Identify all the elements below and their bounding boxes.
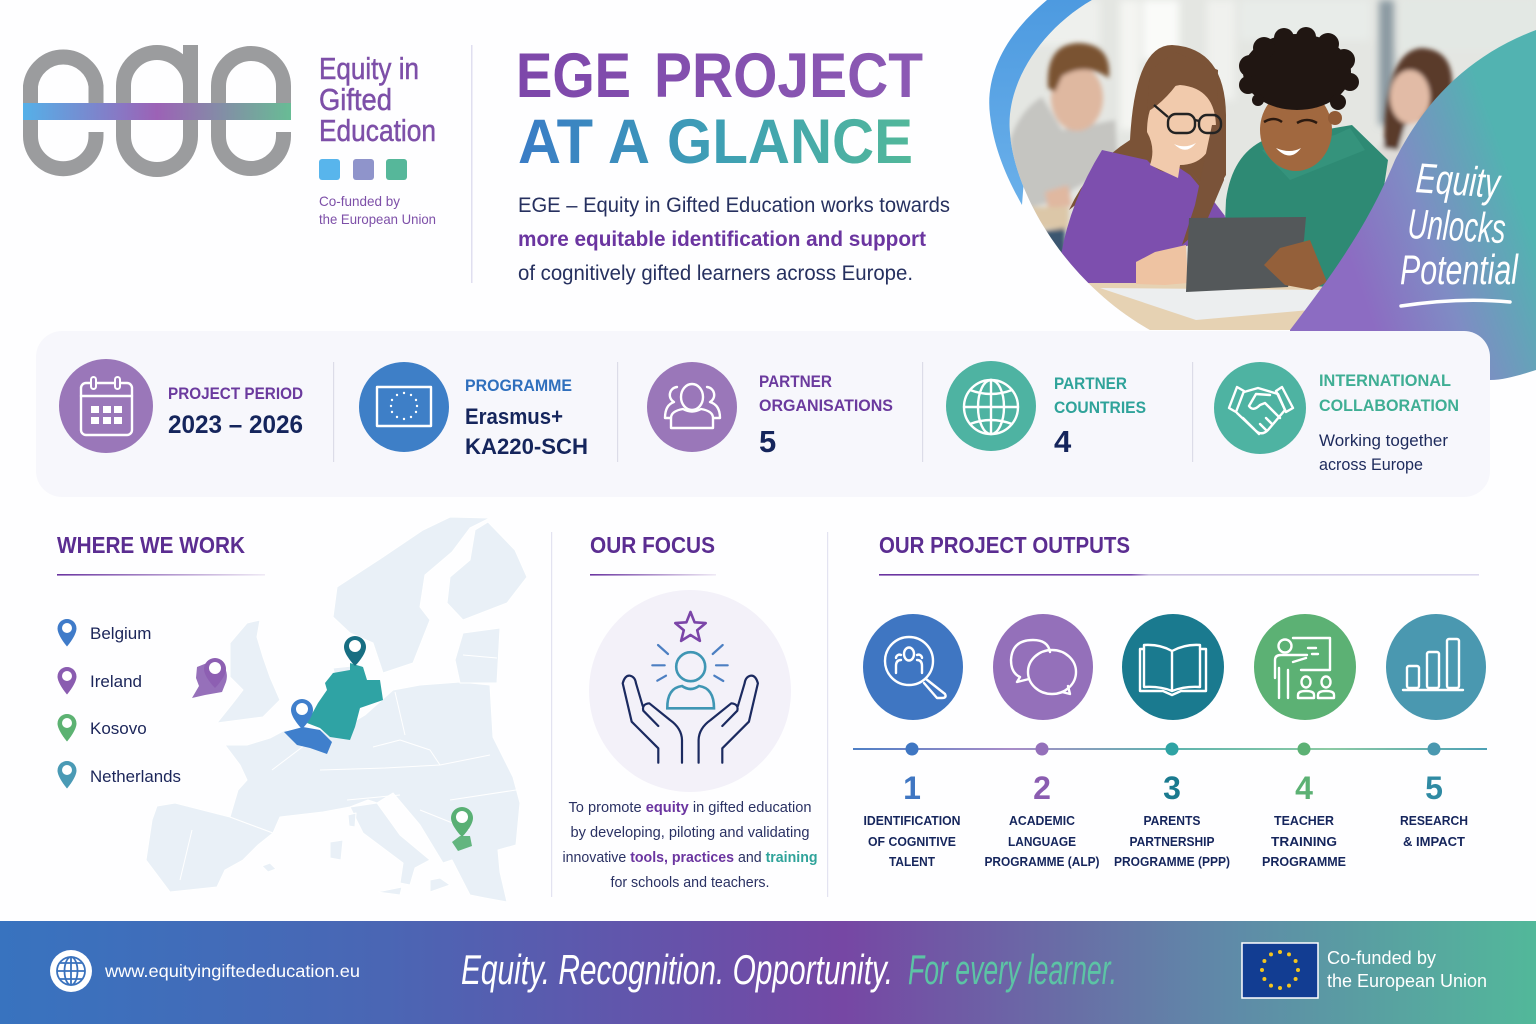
website: www.equityingiftededucation.eu: [104, 961, 360, 981]
legend: countries: [58, 619, 181, 788]
project period: PROJECT PERIOD: [168, 384, 303, 403]
co-funded text: [1327, 948, 1487, 991]
icon: EU flag: [359, 362, 449, 452]
blue swoosh: [989, 0, 1092, 205]
output 2: ACADEMIC: [1009, 813, 1076, 828]
Ireland: [192, 663, 227, 698]
title: [516, 41, 923, 177]
icon: globe: [50, 950, 92, 992]
panel: key facts: [36, 331, 1490, 497]
output 1: TALENT: [889, 854, 935, 869]
output 4: PROGRAMME: [1262, 854, 1346, 869]
boy hoodie: [1225, 125, 1388, 287]
focus text: To promote equity in gifted education: [568, 799, 812, 816]
programme: [465, 376, 588, 459]
output 3: PROGRAMME (PPP): [1114, 854, 1230, 869]
EU flag: [1242, 943, 1318, 998]
logo wordmark: the European Union: [319, 211, 436, 227]
footer slogan: For every learner.: [908, 946, 1117, 993]
partner countries: [1054, 374, 1146, 459]
tagline: Equity: [1414, 154, 1504, 207]
Germany and Netherlands: [307, 663, 383, 740]
international collaboration: [1319, 371, 1459, 474]
icon: hands lifting learner: [589, 590, 791, 792]
girl hand: [1136, 245, 1188, 285]
output 5: & IMPACT: [1403, 834, 1465, 849]
output 5: [1400, 770, 1468, 849]
output 1: [864, 770, 960, 869]
international collaboration: Working together: [1319, 432, 1449, 450]
girl face: [1147, 85, 1216, 178]
boy hand: [1264, 240, 1327, 290]
partner organisations: PARTNER: [759, 372, 832, 391]
output 2: [984, 770, 1100, 869]
glasses: [1154, 105, 1221, 133]
output 3: PARTNERSHIP: [1130, 834, 1215, 849]
partner countries: 4: [1054, 424, 1072, 459]
girl sweater: [1060, 150, 1226, 283]
timeline: [853, 742, 1487, 756]
logo wordmark: Co-funded by: [319, 193, 400, 209]
icon: people: [647, 362, 737, 452]
logo wordmark: Equity in: [319, 51, 419, 86]
icon: open book: [1122, 614, 1224, 720]
highlighted countries: [192, 663, 472, 851]
output 5: RESEARCH: [1400, 813, 1468, 828]
title: PROJECT: [654, 41, 923, 111]
tablet: [1186, 217, 1306, 292]
logo: EGE mark: [23, 45, 291, 169]
output 3: 3: [1163, 770, 1181, 806]
programme: KA220-SCH: [465, 434, 588, 459]
map pins: [204, 636, 473, 837]
programme: Erasmus+: [465, 404, 563, 429]
intro paragraph: [518, 194, 950, 285]
heading: our project outputs: OUR PROJECT OUTPUTS: [879, 532, 1130, 558]
desk and paper: [1088, 283, 1322, 330]
legend: countries: Netherlands: [90, 767, 181, 786]
footer band: [0, 921, 1536, 1024]
international collaboration: COLLABORATION: [1319, 396, 1459, 415]
legend: countries: Kosovo: [90, 719, 147, 738]
heading: where we work: WHERE WE WORK: [57, 532, 245, 558]
icon: calendar: [59, 359, 153, 453]
partner countries: COUNTRIES: [1054, 398, 1146, 417]
title: AT: [518, 107, 593, 177]
co-funded text: Co-funded by: [1327, 948, 1436, 968]
title: GLANCE: [667, 107, 913, 177]
gradient blob with tagline: [1290, 30, 1536, 380]
output 3: [1114, 770, 1230, 869]
icon: globe: [946, 361, 1036, 451]
output 4: 4: [1295, 770, 1313, 806]
background girl: [1368, 48, 1452, 175]
output 1: 1: [903, 770, 921, 806]
Kosovo: [452, 836, 472, 851]
output 4: [1262, 770, 1346, 869]
output 2: PROGRAMME (ALP): [984, 854, 1100, 869]
output 4: TRAINING: [1271, 834, 1337, 849]
logo wordmark: Gifted: [319, 82, 392, 117]
output 5: 5: [1425, 770, 1443, 806]
output 4: TEACHER: [1274, 813, 1335, 828]
intro paragraph: more equitable identification and support: [518, 228, 926, 251]
project period: [168, 384, 303, 439]
partner organisations: 5: [759, 424, 776, 459]
intro paragraph: EGE – Equity in Gifted Education works towards: [518, 194, 950, 217]
focus text: innovative tools, practices and training: [562, 849, 818, 866]
output 1: OF COGNITIVE: [868, 834, 956, 849]
girl hair back: [1069, 45, 1226, 210]
programme: PROGRAMME: [465, 376, 572, 395]
international collaboration: INTERNATIONAL: [1319, 371, 1451, 390]
co-funded text: the European Union: [1327, 971, 1487, 991]
project period: 2023 – 2026: [168, 411, 303, 439]
output 1: IDENTIFICATION: [864, 813, 960, 828]
legend: countries: Ireland: [90, 672, 142, 691]
intro paragraph: of cognitively gifted learners across Europe.: [518, 262, 913, 285]
legend: countries: Belgium: [90, 624, 151, 643]
logo wordmark: [319, 51, 436, 227]
focus text: for schools and teachers.: [610, 874, 770, 891]
icon: speech bubbles: [993, 614, 1093, 720]
title: EGE: [516, 41, 631, 111]
focus text: by developing, piloting and validating: [570, 824, 810, 841]
boy hair: [1239, 27, 1359, 110]
partner countries: PARTNER: [1054, 374, 1127, 393]
logo wordmark: Education: [319, 113, 436, 148]
background boy: [1010, 43, 1118, 265]
heading: our focus: [590, 532, 716, 576]
output 2: 2: [1033, 770, 1051, 806]
international collaboration: across Europe: [1319, 456, 1423, 474]
footer slogan: Equity. Recognition. Opportunity.: [461, 946, 893, 993]
focus text: [562, 799, 818, 891]
map of Europe: [146, 517, 527, 902]
partner organisations: [759, 372, 893, 459]
icon: teacher: [1254, 614, 1356, 720]
output 2: LANGUAGE: [1008, 834, 1076, 849]
tagline: [1400, 154, 1519, 293]
output 3: PARENTS: [1144, 813, 1201, 828]
heading: our focus: OUR FOCUS: [590, 532, 715, 558]
icon: bar chart: [1386, 614, 1486, 720]
partner organisations: ORGANISATIONS: [759, 396, 893, 415]
title: A: [608, 107, 650, 177]
boy face: [1260, 104, 1332, 171]
Belgium: [284, 727, 332, 754]
icon: identification: [863, 614, 963, 720]
icon: handshake: [1214, 362, 1306, 454]
classroom photo: [980, 0, 1536, 335]
